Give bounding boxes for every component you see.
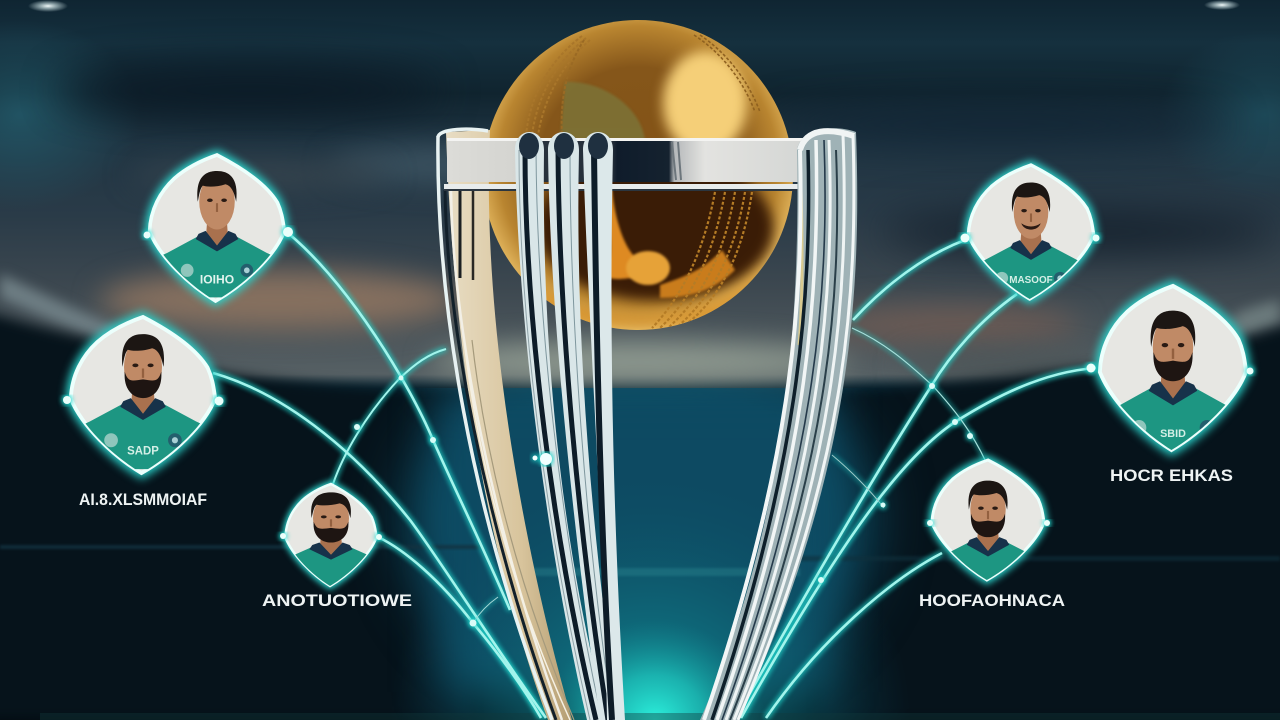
ball: lower-right seam [652,192,752,328]
side nodes [280,533,382,540]
trophy: right strut bundle [700,128,857,720]
side nodes [960,234,1100,242]
line: lower-left player [378,537,541,718]
jersey text: IOIHO [200,272,234,287]
player portrait: middle left [63,317,224,473]
line: thin right connection lower [832,455,884,508]
side nodes [927,520,1050,526]
line: upper-right player [853,240,965,320]
label: lower right player name: HOOFAOHNACA [919,591,1065,610]
player portrait: lower right [926,460,1050,600]
label: right player name: HOCR EHKAS [1110,466,1233,485]
side nodes [1086,364,1254,374]
line: thin link from lower-left player to trophy [333,349,446,484]
jersey text: SADP [127,445,159,457]
ball: lower orange edge [530,265,765,325]
line: far-right player [741,368,1096,718]
player portrait: far right [1086,286,1254,460]
line: upper-right player lower link [736,294,1017,718]
silver trophy [438,128,857,720]
golden cricket ball [483,20,793,330]
trophy: centre strut two [548,132,618,720]
jersey text: SBID [1160,428,1186,440]
line: lower-right player [766,553,942,718]
player portrait: top right [960,165,1100,304]
side nodes [63,396,224,406]
trophy: left curved strut [438,129,574,720]
trophy: centre strut three [583,132,625,720]
player portrait: lower left [268,484,394,598]
ball: upper-left seam [526,36,590,135]
ball: pale highlight [663,51,747,155]
line: thin right connection [852,328,986,462]
ball: lower shadow [544,182,782,308]
trophy: sparkle [532,453,552,465]
trophy: centre strut one [515,132,607,720]
line: thin arc near trophy base [473,597,498,623]
trophy: metal ring band [444,138,806,191]
ball: green-tinted reflection [560,82,645,140]
jersey text: MASOOF [1009,275,1053,286]
player portrait: top left [144,155,293,301]
connector nodes [354,376,973,626]
label: left player name: AI.8.XLSMMOIAF [79,490,207,509]
side nodes [144,227,293,238]
ball: orange swoop reflection [612,191,635,281]
line: mid-left player [213,373,546,718]
ball: upper-right seam [694,35,760,112]
line: top-left player [288,233,510,610]
label: lower left player name: ANOTUOTIOWE [262,591,412,610]
connector lines from players to trophy [213,233,1096,718]
